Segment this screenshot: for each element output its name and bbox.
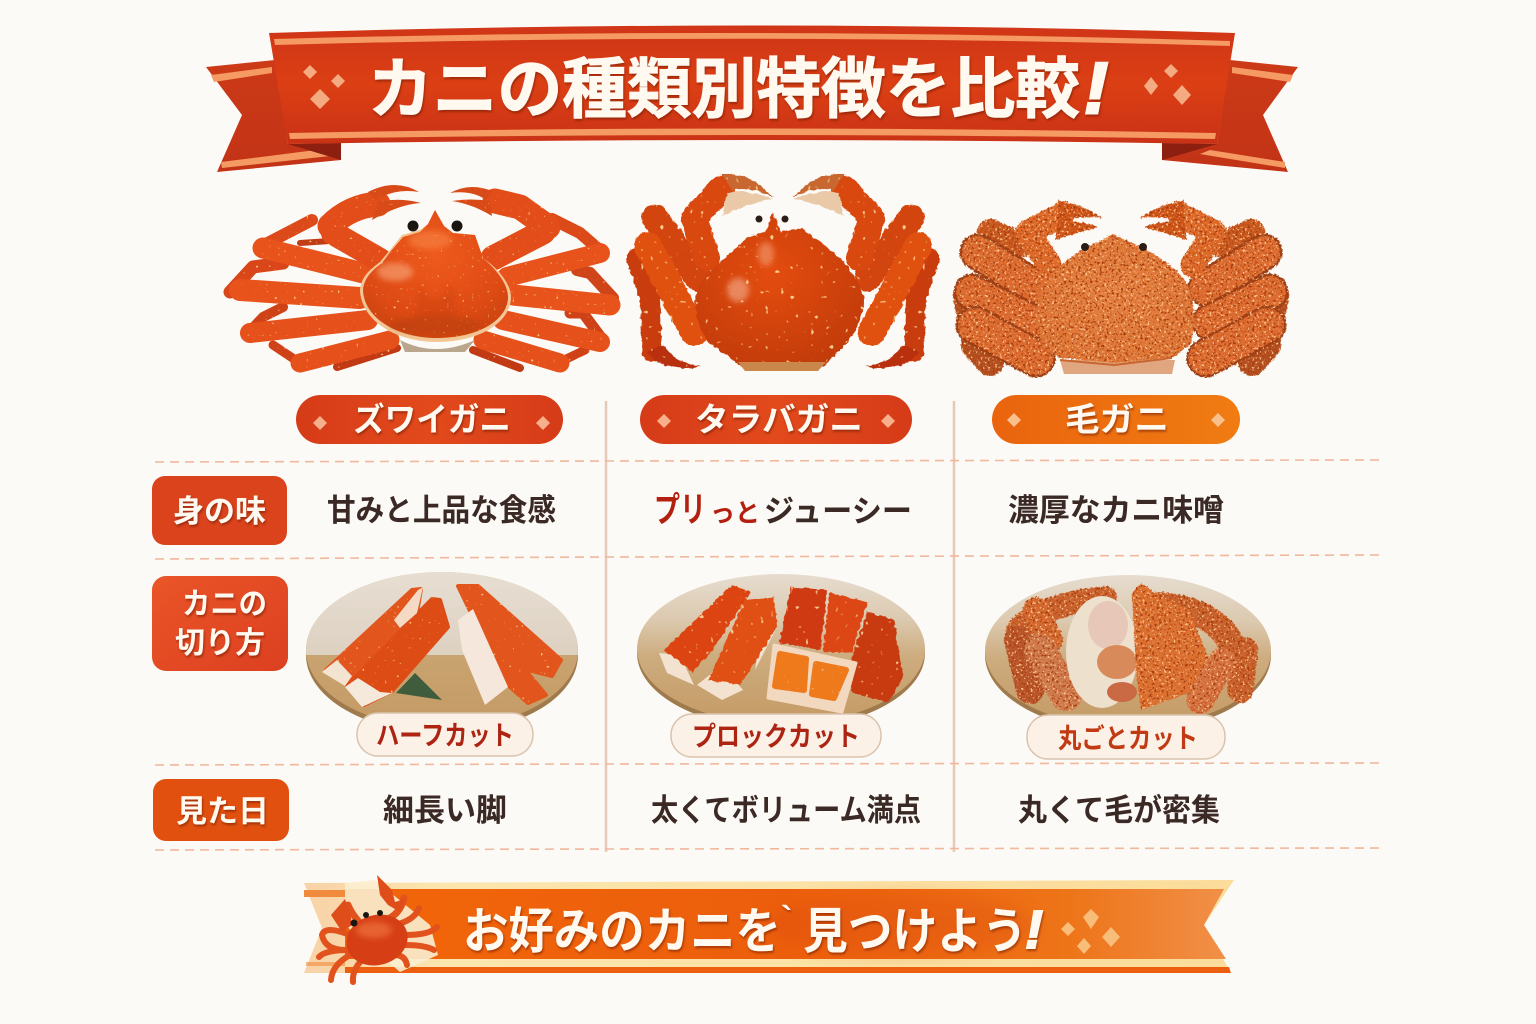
platter: half cut (306, 572, 578, 718)
ribbon right tail (1162, 60, 1298, 172)
icon: small crab (319, 875, 438, 982)
taste text: king crab: ジューシー (764, 494, 912, 529)
taste text: king crab: っと (710, 498, 760, 528)
taste text: hairy crab: 濃厚なカニ味噌 (1008, 493, 1224, 528)
appearance text: hairy crab: 丸くて毛が密集 (1018, 793, 1220, 828)
column dividers (606, 401, 954, 852)
ribbon lower stripe (345, 967, 1231, 973)
appearance text: snow crab: 細長い脚 (383, 793, 507, 828)
name pill: king crab (640, 395, 912, 444)
label: block cut (671, 714, 881, 757)
label: whole cut: 丸ごとカット (1058, 723, 1198, 754)
ribbon main band (269, 26, 1235, 144)
ribbon left tail (206, 60, 341, 172)
ribbon headline: 見つけよう (803, 905, 1027, 959)
row label: cut style: 切り方 (175, 627, 265, 660)
taste text: king crab (654, 491, 912, 530)
leaf (396, 673, 442, 700)
name pill: hairy crab: 毛ガニ (1065, 401, 1169, 438)
title ribbon (206, 26, 1298, 172)
taste text: snow crab: 甘みと上品な食感 (327, 493, 556, 528)
title text: ! (1084, 49, 1108, 129)
right legs (450, 187, 613, 368)
ribbon headline: ` (781, 900, 792, 938)
ribbon headline: ! (1025, 900, 1043, 960)
appearance text: king crab: 太くてボリューム満点 (651, 793, 921, 828)
crab: king crab (636, 174, 930, 371)
ribbon orange field (345, 889, 1226, 959)
taste text: king crab: プリ (654, 491, 706, 530)
bottom ribbon (304, 875, 1234, 982)
name pill: king crab: タラバガニ (695, 401, 863, 438)
ribbon headline: お好みのカニを (463, 905, 781, 959)
left legs (230, 185, 421, 367)
row label: taste: 身の味 (173, 494, 266, 529)
row label: appearance: 見た日 (176, 794, 269, 829)
left sparkle diamonds (303, 65, 345, 109)
label: block cut: プロックカット (692, 722, 860, 752)
ribbon headline (463, 900, 1043, 960)
crab leg pieces (326, 586, 561, 705)
name pill: snow crab (296, 395, 563, 444)
row label: taste (152, 476, 287, 545)
row label: appearance (153, 779, 289, 841)
ribbon left stripes (304, 890, 345, 966)
title text: カニの種類別特徴を比較 (368, 52, 1080, 126)
row label: cut style (152, 576, 288, 671)
row dashed lines (155, 460, 1385, 850)
platter: whole cut (985, 575, 1271, 732)
label: half cut: ハーフカット (376, 721, 514, 751)
name pill: snow crab: ズワイガニ (353, 401, 511, 438)
right sparkle diamonds (1061, 909, 1120, 954)
crab: hairy crab (968, 200, 1274, 374)
right sparkle diamonds (1144, 64, 1191, 105)
name pill: hairy crab (992, 395, 1240, 444)
ribbon stripes (274, 33, 1230, 139)
ribbon darker wash (765, 895, 1035, 955)
label: whole cut (1027, 715, 1225, 759)
row label: cut style: カニの (182, 588, 267, 621)
platter: block cut (637, 574, 925, 729)
label: half cut (357, 713, 533, 756)
ribbon band (304, 880, 1234, 973)
crab: snow crab (230, 185, 613, 368)
